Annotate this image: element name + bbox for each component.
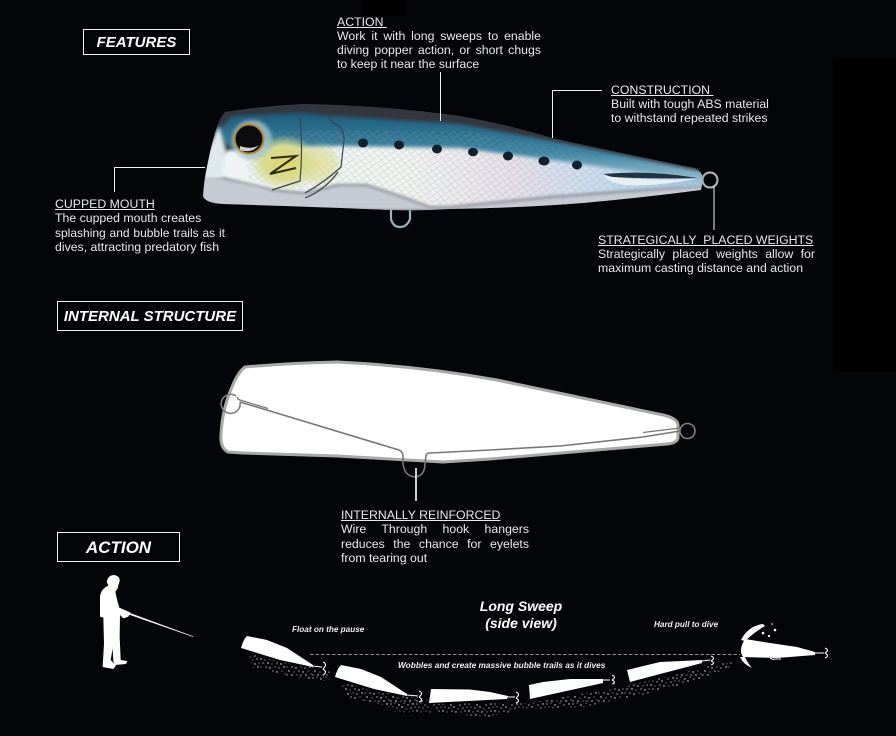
text: action: diving popper action, or short chugs bbox=[337, 43, 541, 57]
text: construction bbox=[611, 82, 769, 125]
splash bbox=[741, 624, 765, 641]
wire bbox=[240, 402, 680, 477]
heading: action: ACTION bbox=[86, 538, 151, 557]
text: strategically placed weights: maximum casting distance and action bbox=[598, 261, 803, 275]
tail ring bbox=[702, 172, 718, 188]
text: strategically placed weights: Strategically placed weights allow for bbox=[598, 247, 815, 261]
black panel: right side bbox=[833, 58, 896, 372]
leader line: cupped mouth bbox=[114, 168, 205, 192]
eye bbox=[232, 120, 272, 160]
leader line: internally reinforced bbox=[415, 468, 417, 501]
body silhouette bbox=[221, 362, 678, 462]
text: internally reinforced: from tearing out bbox=[341, 551, 427, 565]
text: cupped mouth: splashing and bubble trails as it bbox=[55, 226, 225, 240]
text: cupped mouth: The cupped mouth creates bbox=[55, 211, 201, 225]
side stripe bbox=[603, 173, 697, 178]
body bbox=[200, 100, 710, 215]
small lure 3 bbox=[429, 689, 518, 703]
surface line bbox=[310, 654, 740, 656]
label: wobbles: Wobbles and create massive bubble trails as it dives bbox=[398, 660, 606, 670]
heading: features: FEATURES bbox=[97, 34, 176, 51]
small lure 4 bbox=[529, 675, 614, 699]
small lure 5 bbox=[627, 656, 714, 682]
text: construction: Built with tough ABS material bbox=[611, 97, 769, 111]
leader line: construction bbox=[552, 90, 602, 138]
text: strategically placed weights: STRATEGICALLY PLACED WEIGHTS bbox=[598, 232, 813, 246]
text: action bbox=[337, 14, 541, 71]
small lure 6 with splash bbox=[740, 623, 828, 668]
text: action: Work it with long sweeps to enable bbox=[337, 29, 541, 43]
heading: internal structure: INTERNAL STRUCTURE bbox=[64, 308, 236, 325]
Z logo bbox=[270, 156, 296, 174]
text: internally reinforced: INTERNALLY REINFORCED bbox=[341, 508, 500, 522]
belly bbox=[200, 176, 704, 212]
heading: action bbox=[57, 532, 180, 562]
text: cupped mouth: CUPPED MOUTH bbox=[55, 196, 155, 210]
heading: features bbox=[83, 29, 190, 55]
text: internally reinforced bbox=[341, 508, 529, 565]
label: hard pull: Hard pull to dive bbox=[654, 620, 719, 629]
text: cupped mouth: dives, attracting predatory fish bbox=[55, 240, 219, 254]
text: action: ACTION bbox=[337, 14, 383, 28]
leader line: action bbox=[440, 72, 442, 121]
black panel: top strip bbox=[362, 0, 406, 16]
label: float on the pause: Float on the pause bbox=[292, 625, 365, 634]
angler silhouette bbox=[100, 575, 193, 669]
lure photo: features bbox=[200, 100, 718, 227]
text: internally reinforced: Wire Through hook hangers bbox=[341, 522, 529, 536]
label: long sweep title: Long Sweep bbox=[480, 598, 563, 614]
text: construction: to withstand repeated strikes bbox=[611, 111, 768, 125]
left ring bbox=[221, 394, 240, 413]
small lure 1 bbox=[241, 636, 326, 675]
text: action: to keep it near the surface bbox=[337, 57, 479, 71]
spots bbox=[358, 138, 582, 170]
label: side view: (side view) bbox=[485, 615, 557, 631]
right ring bbox=[680, 424, 695, 438]
text: construction: CONSTRUCTION bbox=[611, 82, 710, 96]
text: strategically placed weights bbox=[598, 232, 815, 275]
small lure 2 bbox=[335, 665, 422, 702]
bubble trails bbox=[247, 652, 733, 717]
text: cupped mouth bbox=[55, 196, 225, 254]
text: internally reinforced: reduces the chance for eyelets bbox=[341, 537, 529, 551]
lip eyelet bbox=[391, 209, 410, 227]
heading: internal structure bbox=[57, 301, 243, 331]
lure diagram: internal structure bbox=[221, 362, 695, 477]
wire tails bbox=[237, 397, 680, 432]
leader line: weights bbox=[713, 186, 715, 230]
gill lines bbox=[272, 115, 344, 198]
cheek colour bbox=[249, 135, 321, 191]
